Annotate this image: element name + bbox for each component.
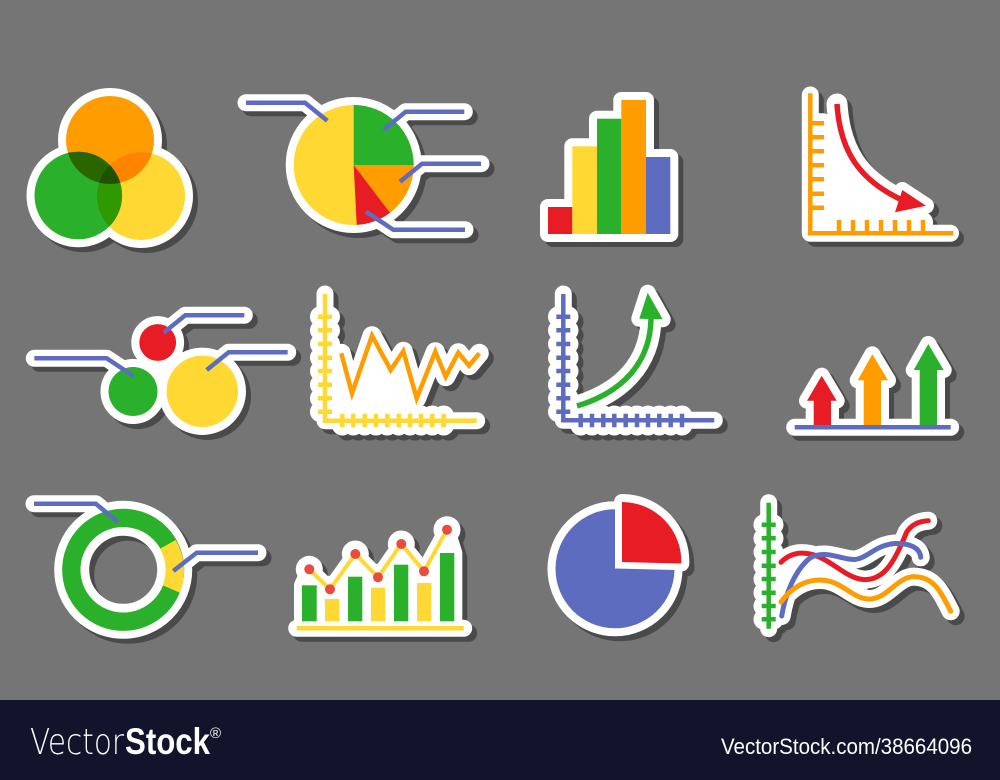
icon: venn diagram [35,96,190,245]
footer bar [0,700,1000,780]
icon: donut chart with callouts [34,504,263,626]
icon: bubble chart with callouts [34,315,293,432]
icon: zigzag line graph [318,294,484,430]
icon: falling curve graph [810,93,956,238]
icon: three curve line graph [762,503,956,634]
logo: Vector: Vector [30,722,124,763]
icon: pie chart with raised slice [556,502,686,633]
icon: three rising arrows [795,344,956,432]
icon: pie chart with callouts [246,103,486,235]
registered mark: ® [210,725,221,742]
icon: bar chart [548,100,675,239]
logo: Stock: Stock [125,721,210,762]
icon: bars with line overlay [296,516,469,633]
image reference: VectorStock.com/38664096 [721,734,972,759]
icon: rising curve graph [556,293,719,430]
